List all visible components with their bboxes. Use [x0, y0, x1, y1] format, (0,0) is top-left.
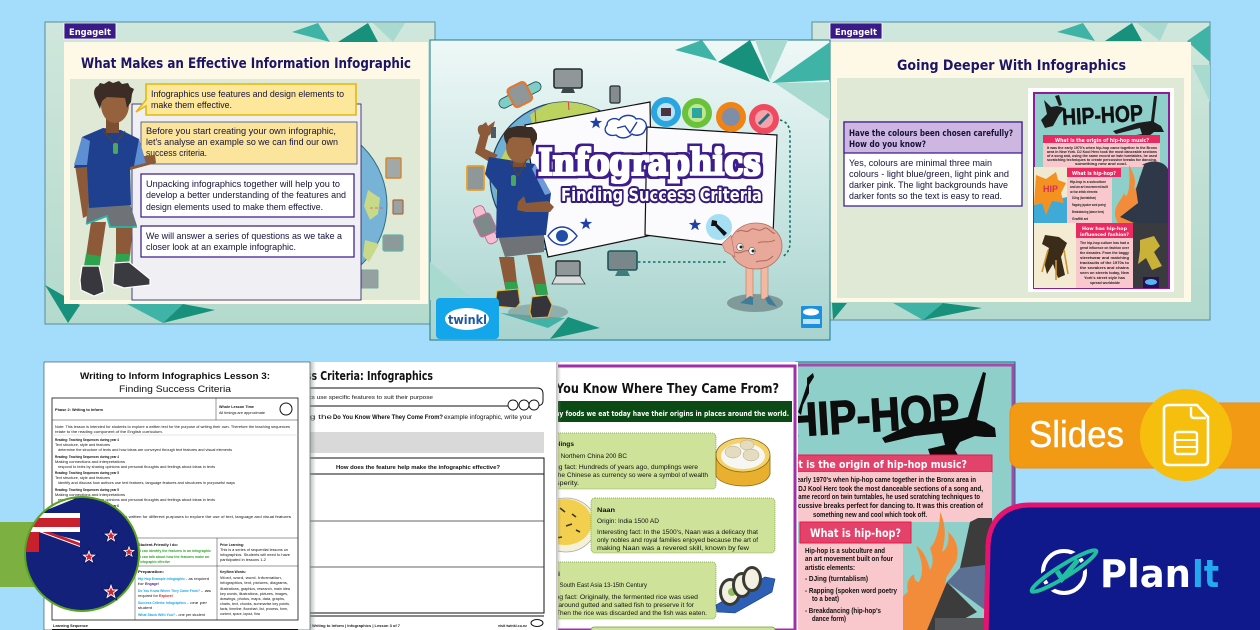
objective strip: Infographics use specific features to suit their purpose [280, 395, 433, 401]
what is hip-hop panel: dance form) [812, 614, 846, 623]
lesson plan table: infographics, text, pictures, diagrams, [220, 580, 288, 585]
dancer [927, 518, 996, 630]
small quality badge [801, 306, 822, 328]
coloured badges [651, 97, 779, 134]
origin text: something new and cool which took off. [813, 510, 927, 519]
panel: slide what makes an effective infographic [45, 22, 435, 324]
lesson plan table: key words, illustrations, pictures, images, [220, 591, 288, 596]
card: sushi [530, 562, 716, 619]
card: dumplings: Origin: Northern China 200 BC [540, 453, 627, 460]
what is hip-hop panel: - Rapping (spoken word poetry [805, 586, 898, 595]
character: boy presenting [74, 81, 156, 296]
slides label: Slides [1029, 414, 1124, 455]
lesson plan table: Reading: Teaching Sequences during year 6 [55, 503, 120, 508]
lesson plan table: - as [201, 588, 211, 593]
mini hip-hop poster: influenced fashion? [1080, 232, 1129, 238]
icons: stars, cloud, eye, wrench [548, 115, 732, 245]
lesson plan table: determine the structure of texts and how ideas are conveyed through text features and visual elements [58, 447, 232, 452]
objective strip [280, 388, 543, 410]
lesson plan table: relate to the reading component of the English curriculum. [55, 429, 163, 434]
panel: lesson plan document [44, 362, 316, 630]
lesson plan table: Explore! [159, 593, 173, 598]
question and answer box: How do you know? [849, 140, 926, 150]
green country tab [0, 522, 40, 587]
lesson plan table: respond to texts by sharing opinions and personal thoughts and feelings about ideas in texts [58, 497, 215, 502]
lesson plan table [52, 398, 298, 620]
lesson plan table: illustrations, graphics, research, main idea [220, 586, 291, 591]
what is hip-hop panel: - Breakdancing (hip-hop's [805, 606, 881, 615]
origin text: create percussive breaks perfect for dancing to. It was this creation of [767, 501, 983, 510]
lesson plan title: Writing to Inform Infographics Lesson 3: [80, 370, 270, 381]
planit logo: It [1192, 552, 1219, 596]
callout: features and design elements: make them effective. [151, 100, 232, 111]
lesson plan table: Reading: Teaching Sequences during year 5 [55, 487, 120, 492]
what is hip-hop panel: to a beat) [812, 594, 839, 603]
instruction: Do You Know Where They Come From? [333, 414, 443, 421]
lesson plan table: respond to texts by sharing opinions and personal thoughts and feelings about ideas in texts [58, 464, 215, 469]
lesson plan table: Prior Learning: [220, 542, 244, 547]
text box: answer questions [141, 226, 354, 257]
mini hip-hop poster: What is the origin of hip-hop music? [1055, 138, 1149, 144]
lesson plan table: drawings, photos, maps, data, graphs, [220, 596, 285, 601]
flames [896, 512, 958, 630]
illustration: naan [536, 498, 596, 552]
lesson plan table: Note: This lesson is intended for students to explore a written text for the purpose of writing their own. Therefore the teaching sequences [55, 424, 290, 429]
mini hip-hop poster: The hip-hop culture has had a [1080, 241, 1129, 245]
lesson plan table: Text structure, style and features [55, 442, 110, 447]
card: naan: only nobles and royal families enjoyed because the art of [597, 537, 758, 544]
mini hip-hop poster: HIP [1043, 184, 1058, 194]
planit logo: Plan [1100, 552, 1191, 596]
lesson plan table: Success Criteria: Infographics [138, 600, 187, 605]
panel: slide going deeper with infographics [812, 22, 1210, 320]
illustration: sushi rolls [716, 566, 775, 613]
lesson plan table: identify and discuss how authors use text features, language features and structures in purposeful ways [58, 480, 235, 485]
boy with thumbs up [475, 121, 568, 320]
card: dumplings [530, 433, 716, 489]
learning sequence heading: Learning Sequence [53, 623, 89, 628]
worksheet footer: visit twinkl.co.nz [498, 624, 527, 628]
heading: Going Deeper With Infographics [897, 58, 1126, 74]
mini hip-hop poster: of a song and, using the same record on twin turntables, he used [1047, 154, 1157, 158]
origin text: New York. DJ Kool Herc took the most danceable sections of a song and, [767, 484, 983, 493]
worksheet footer [295, 620, 543, 628]
card: next food [591, 627, 775, 630]
lesson plan table: - one per student [176, 612, 206, 617]
mini hip-hop poster: the sneakers and chains [1080, 266, 1129, 270]
worksheet heading: Success Criteria: Infographics [275, 369, 433, 383]
globe [490, 101, 601, 252]
lesson plan table: Phase 2: Writing to Inform [55, 407, 103, 412]
callout: before you start: Before you start creating your own infographic, [146, 126, 336, 137]
lesson plan table: Making connections and interpretations [55, 492, 125, 497]
lesson plan table: Hip Hop Example Infographic [138, 576, 186, 581]
brain character [722, 223, 783, 312]
mini hip-hop poster: and an art movement built [1070, 185, 1109, 189]
card: dumplings: Interesting fact: Hundreds of years ago, dumplings were [531, 464, 698, 471]
icon: new zealand flag [20, 494, 140, 612]
lesson plan table: student [138, 605, 153, 610]
text box: unpacking infographics: develop a better understanding of the features and [146, 190, 346, 201]
lesson plan table: Making connections and interpretations [55, 459, 125, 464]
response table: How does the feature help make the infographic effective? [336, 465, 501, 471]
lesson plan table: infographics. Students will need to have [220, 552, 291, 557]
lesson plan table: identify and discuss a range of texts written for different purposes to explore the use of text, language and visual features [58, 514, 291, 519]
lesson plan table: required for [138, 593, 159, 598]
mini hip-hop poster: the decades. From the baggy [1080, 251, 1129, 255]
mini hip-hop poster: What is hip-hop? [1072, 171, 1116, 177]
panel: success criteria worksheet [275, 362, 561, 630]
subtitle: Finding Success Criteria [561, 186, 762, 206]
lesson plan table: Reading: Teaching Sequences during year 5 [55, 470, 120, 475]
breakdancer silhouette [798, 372, 996, 455]
card: naan: Interesting fact: In the 1500's, Naan was a delicacy that [597, 529, 758, 536]
lesson plan table: This is a series of sequential lessons on [220, 547, 288, 552]
origin text [767, 472, 992, 522]
lesson plan table: Reading: Teaching Sequences during year 4 [55, 437, 120, 442]
lesson plan table: Preparation: [138, 569, 164, 574]
heading: What Makes an Effective Information Infographic [81, 56, 411, 72]
question and answer box: colours - light blue/green, light pink and [849, 169, 1009, 180]
card: sushi: Interesting fact: Originally, the fermented rice was used [531, 594, 698, 601]
instruction: example infographic, write your [444, 414, 533, 421]
lesson plan table: Do You Know Where They Came From? [138, 588, 200, 593]
twinkl logo: twinkl [448, 312, 487, 327]
engageit tab: EngageIt [835, 28, 878, 38]
panel: do you know where they came from document [530, 362, 798, 630]
dotted connector line [638, 120, 790, 262]
twinkl logo [436, 298, 499, 339]
callout: features and design elements: Infographics use features and design elements to [151, 89, 344, 100]
callout: before you start [141, 122, 357, 164]
icon: slides document [1140, 389, 1232, 481]
what is hip-hop panel: What is hip-hop? [810, 526, 901, 540]
mini hip-hop poster: It was the early 1970's when hip-hop came together in the Bronx [1047, 146, 1157, 150]
mini hip-hop poster: on four artistic elements: [1070, 190, 1098, 194]
card: sushi: Origin: South East Asia 13-15th Century [540, 582, 648, 589]
torn paper pages [525, 102, 777, 257]
engageit tab: EngageIt [69, 28, 112, 38]
text box: unpacking infographics: Unpacking infographics together will help you to [146, 179, 340, 190]
green banner [540, 401, 792, 422]
lesson plan table: for [138, 581, 145, 586]
white backing panel [132, 104, 361, 300]
mini hip-hop poster: DJing (turntablism) [1072, 196, 1096, 200]
lesson plan table: content, space, layout, flow [220, 611, 260, 616]
origin heading bar [775, 455, 992, 472]
text box: answer questions: closer look at an example infographic. [146, 242, 296, 253]
text box: answer questions: We will answer a series of questions as we take a [146, 231, 343, 242]
slides banner [1010, 389, 1260, 481]
lesson plan table: I can identify the features in an infographic [140, 548, 212, 553]
what is hip-hop panel: artistic elements: [805, 563, 855, 572]
mini hip-hop poster: seen on streets today, New [1080, 271, 1129, 275]
origin heading bar: What is the origin of hip-hop music? [775, 459, 967, 471]
card: naan: Origin: India 1500 AD [597, 518, 659, 525]
lesson plan title: Finding Success Criteria [119, 383, 232, 394]
card: sushi: wrapped around gutted and salted fish to preserve it for [530, 602, 695, 609]
card: naan [591, 498, 775, 553]
panel: title slide [430, 40, 830, 340]
lesson plan table: What Stuck With You? [138, 612, 175, 617]
callout: before you start: let's analyse an example so we can find our own [146, 137, 338, 148]
origin text: using the same record on twin turntables, he used scratching techniques to [767, 492, 980, 501]
device icons [467, 69, 637, 284]
lesson plan table: - as required [186, 576, 209, 581]
mini hip-hop poster: great influence on fashion over [1080, 246, 1130, 250]
poster title: HIP-HOP [786, 383, 961, 447]
lesson plan table: - one per [187, 600, 208, 605]
planit logo [1028, 545, 1219, 597]
green banner: Many foods we eat today have their origins in places around the world. [545, 409, 789, 418]
lesson plan table: Text structure, style and features [55, 475, 110, 480]
question and answer box: darker pink. The light backgrounds have [849, 180, 1008, 191]
question and answer box: Yes, colours are minimal three main [849, 158, 992, 169]
mini hip-hop poster: Hip-hop is a subculture [1070, 180, 1106, 184]
main title: Infographics [538, 142, 761, 184]
mini hip-hop poster [1028, 88, 1174, 292]
callout: before you start: success criteria. [146, 148, 207, 159]
planit panel [986, 505, 1260, 630]
mini hip-hop poster: tracksuits of the 1970s to [1080, 261, 1129, 265]
question and answer box: darker fonts so the text is easy to read. [849, 191, 1002, 202]
lesson plan table: Engage! [145, 581, 159, 586]
lesson plan table: Student-Friendly I do: [138, 542, 178, 547]
lesson plan table: participated in lessons 1-2 [220, 557, 267, 562]
response table [290, 458, 544, 616]
card: sushi: months. Then the rice was discarded and the fish was eaten. [531, 610, 707, 617]
lesson plan table: infographic effective [140, 559, 171, 564]
mini hip-hop poster: HIP-HOP [1061, 100, 1144, 130]
lesson plan table: Reading: Teaching Sequences during year 4 [55, 454, 120, 459]
callout: features and design elements [136, 84, 356, 115]
lesson plan table: charts, text, chunks, summarise key points, [220, 601, 290, 606]
mini hip-hop poster: How has hip-hop [1082, 226, 1128, 232]
question and answer box [844, 122, 1022, 206]
origin text: It was the early 1970's when hip-hop came together in the Bronx area in [767, 475, 976, 484]
illustration: dumpling steamer [716, 438, 770, 486]
text box: unpacking infographics: design elements used to make them effective. [146, 202, 323, 213]
lesson plan table: facts, timeline, flowchart, list, process, form, [220, 606, 288, 611]
document heading: Do You Know Where They Came From? [535, 382, 779, 397]
mini hip-hop poster: Breakdancing (dance form) [1072, 210, 1104, 214]
mini hip-hop poster: something new and cool. [1075, 162, 1127, 166]
mini hip-hop poster: spread worldwide [1090, 281, 1120, 285]
mini hip-hop poster: scratching techniques to create percussive breaks for dancing. [1047, 158, 1157, 162]
mini hip-hop poster: area in New York. DJ Kool Herc took the most danceable sections [1047, 150, 1157, 154]
teal triangles [430, 40, 830, 339]
lesson plan title [80, 370, 270, 394]
instruction: Using the [290, 414, 332, 421]
lesson plan table: Word, word, word. Information, [220, 575, 282, 580]
instruction [290, 414, 533, 421]
what is hip-hop panel: an art movement built on four [805, 554, 893, 563]
card: dumplings: and prosperity. [531, 480, 579, 487]
card: sushi: Sushi [540, 571, 560, 578]
mini hip-hop poster: Graffiti art [1072, 217, 1089, 221]
mini hip-hop poster: Rapping (spoken word poetry) [1072, 203, 1106, 207]
lesson plan table: Whole Lesson Time [219, 404, 255, 409]
what is hip-hop panel [798, 522, 911, 630]
card: dumplings: Dumplings [540, 441, 574, 448]
card: naan: Naan [597, 507, 615, 514]
text box: unpacking infographics [141, 174, 354, 217]
card: naan: making Naan was a revered skill, known by few [597, 545, 749, 552]
question and answer box: Have the colours been chosen carefully? [849, 129, 1013, 139]
lesson plan table: All timings are approximate [219, 410, 266, 415]
panel: hip-hop infographic document [767, 362, 1015, 630]
globe and devices behind text [223, 123, 403, 288]
mini hip-hop poster: York's street style has [1084, 276, 1125, 280]
lesson plan table: Key/New Words: [220, 569, 246, 574]
worksheet footer: Writing | Writing to Inform | Infographics | Lesson 3 of 7 [295, 624, 400, 628]
what is hip-hop panel: Hip-hop is a subculture and [805, 546, 885, 555]
engageit tab [64, 23, 116, 39]
card: dumplings: used by the Chinese as currency so were a symbol of wealth [531, 472, 708, 479]
grey band [290, 432, 544, 453]
mini hip-hop poster: streetwear and matching [1080, 256, 1129, 260]
lesson plan table: I can talk about how the features make an [140, 554, 209, 559]
what is hip-hop panel: - DJing (turntablism) [805, 574, 868, 583]
engageit tab [830, 23, 882, 39]
